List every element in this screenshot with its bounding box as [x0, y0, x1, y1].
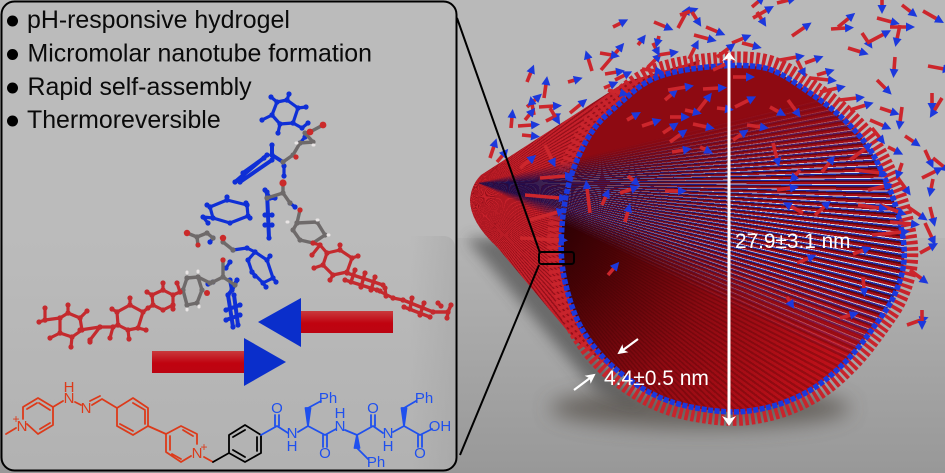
blue head: [244, 338, 286, 386]
orange atom labels: N: [17, 418, 27, 435]
bullet list: [7, 6, 372, 134]
blue atom labels: OH: [429, 418, 451, 435]
orange atom labels: N: [81, 400, 91, 417]
blue atom labels: O: [271, 400, 283, 417]
tube interior: [561, 65, 904, 412]
diameter label: 27.9±3.1 nm: [735, 230, 850, 253]
bullet 4: [7, 116, 18, 126]
panel right shading: [3, 236, 455, 469]
scattered monomer arrows: [490, 0, 944, 325]
3D molecular model: [39, 94, 451, 347]
orange atom labels: N: [192, 445, 202, 462]
blue atom labels: O: [367, 400, 379, 417]
blue atom labels: N: [335, 418, 345, 435]
blue tripeptide: [261, 401, 432, 459]
bullet 2: [7, 49, 18, 60]
bullet 1: [7, 16, 18, 26]
gray backbone: [183, 125, 325, 305]
tube outer wall: [470, 60, 700, 368]
diameter arrow head top: [722, 52, 736, 61]
blue atom labels: O: [414, 445, 426, 462]
blue atom labels: H: [383, 438, 393, 455]
red chain right: [312, 243, 451, 318]
blue atom labels: Ph: [367, 454, 385, 471]
callout zoom lines: [457, 18, 540, 455]
text: self-assembly: Rapid self-assembly: [28, 73, 252, 101]
blue atom labels: N: [287, 425, 297, 442]
stacking arrow pointing right: [152, 338, 286, 386]
blue atom labels: Ph: [319, 390, 337, 407]
black benzyl linker: [213, 425, 261, 462]
blue atom labels: [271, 390, 451, 471]
blue atom labels: Ph: [415, 390, 433, 407]
blue head: [258, 298, 301, 347]
red shaft: [300, 311, 393, 333]
wall thickness arrow upper: [619, 339, 638, 353]
wall thickness arrow lower: [574, 375, 594, 390]
stacking arrow pointing left: [258, 298, 393, 347]
red shaft: [152, 351, 245, 373]
orange hydrazone pyridinium segment: [6, 396, 213, 462]
vertical diameter arrow: [728, 54, 730, 424]
red chain left: [39, 283, 180, 347]
wall thickness label: 4.4±0.5 nm: [604, 367, 709, 390]
text: nanotube formation: Micromolar nanotube formation: [28, 40, 372, 68]
orange atom labels: H: [64, 379, 74, 396]
bullet 3: [7, 82, 18, 94]
orange atom labels: N: [64, 390, 74, 407]
white hydrogens: [187, 143, 329, 310]
red oxygen atoms: [184, 122, 326, 296]
blue atom labels: N: [383, 425, 393, 442]
blue atom labels: H: [335, 405, 345, 422]
orange atom labels: +: [12, 412, 20, 426]
text: thermoreversible: Thermoreversible: [27, 106, 221, 134]
blue atom labels: O: [319, 445, 331, 462]
orange atom labels: +: [200, 440, 208, 454]
callout zoom box: [539, 252, 574, 264]
orange atom labels: [12, 379, 208, 462]
chemical structure: [6, 379, 451, 471]
fan of white and blue fibres: [478, 102, 904, 358]
blue phenylalanine side chains: [203, 94, 308, 327]
diameter arrow head bottom: [722, 416, 736, 426]
panel box: [2, 2, 456, 470]
blue atom labels: H: [287, 438, 297, 455]
text: hydrogel: pH-responsive hydrogel: [27, 6, 290, 34]
blue ring of arrow heads: [561, 65, 904, 412]
